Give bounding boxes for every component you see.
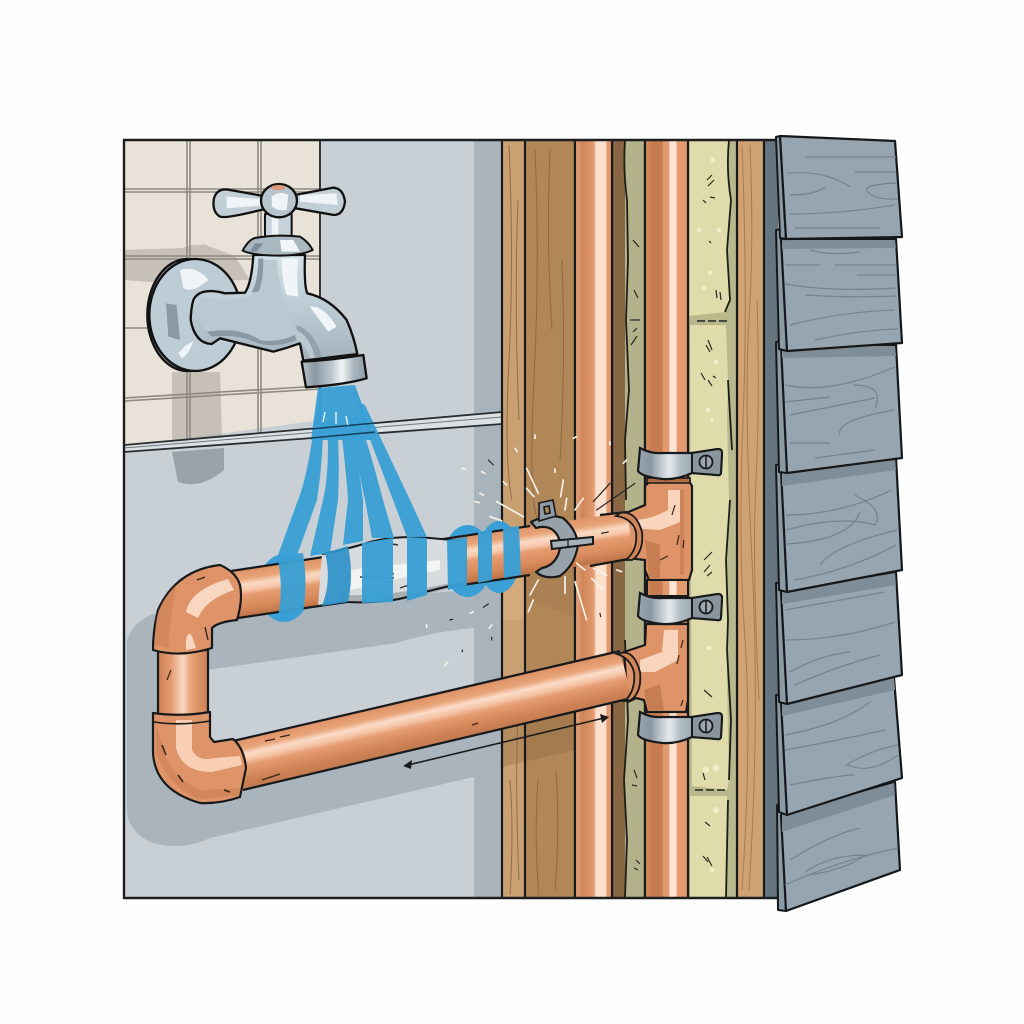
vertical pipe between elbows <box>158 650 208 720</box>
stud grain and shadows <box>502 145 575 895</box>
wood studs <box>502 140 525 898</box>
split clamp on pipe <box>531 500 593 577</box>
outer wood stud <box>737 140 764 898</box>
burst pipe bulge <box>318 537 463 606</box>
band C <box>362 538 393 603</box>
valve skirt <box>243 236 313 256</box>
upper horizontal pipe <box>231 512 642 618</box>
wall trim rail <box>124 412 502 452</box>
water spray sparks around leak <box>427 435 635 666</box>
clamp: bottom <box>638 712 722 743</box>
siding board 5 <box>776 573 902 704</box>
faucet body <box>191 255 357 361</box>
siding board 1 <box>776 136 902 239</box>
pipe shadow on wall <box>127 590 474 846</box>
siding board 2 <box>776 229 902 351</box>
water rings behind pipe <box>258 521 520 622</box>
white streaks in spray <box>323 412 348 426</box>
frame outline <box>124 140 778 898</box>
panel: tiled wall section <box>124 140 320 484</box>
upper elbow <box>153 565 241 654</box>
band E <box>447 537 467 590</box>
siding board 3 <box>776 341 902 473</box>
panel: siding boards <box>776 136 902 911</box>
lower elbow <box>153 712 246 803</box>
siding board 7 <box>777 782 900 911</box>
stem highlight <box>272 217 278 237</box>
band D <box>407 537 427 601</box>
aerator nozzle <box>302 355 367 387</box>
band A <box>277 553 306 617</box>
siding board 4 <box>776 458 902 592</box>
vertical copper pipes <box>575 140 688 898</box>
stream ribbon 2 <box>310 420 339 556</box>
rear of ring 2 <box>478 521 520 593</box>
spray fan top <box>311 385 372 440</box>
section lines <box>502 140 764 898</box>
T fitting: lower <box>624 624 688 712</box>
band B <box>322 546 351 606</box>
insulation <box>624 140 737 898</box>
stream ribbon 1 <box>278 405 323 558</box>
rear of ring 1 <box>443 525 492 597</box>
panel: interior wall <box>124 140 502 898</box>
siding board 6 <box>776 678 902 815</box>
T fitting: upper <box>626 478 692 596</box>
water wrapping around pipe <box>277 526 521 617</box>
cross handle <box>213 184 345 217</box>
tile grout <box>124 140 320 445</box>
wall plate <box>147 259 241 371</box>
trim lines across spray <box>311 423 375 438</box>
valve stem <box>265 214 292 238</box>
rear of band A <box>258 554 310 622</box>
panel: wall cross-section <box>502 140 778 898</box>
stream ribbon 5 <box>355 400 427 537</box>
stream ribbon 3 <box>340 420 363 545</box>
clamp: middle <box>638 593 722 624</box>
ring 2 front band <box>503 526 521 578</box>
direction arrow <box>403 714 609 769</box>
ring 1 front band <box>478 530 492 583</box>
sheathing strip <box>764 140 778 898</box>
clamp: top <box>638 448 722 479</box>
faucet shadow on tile <box>124 244 250 450</box>
water stream from faucet <box>278 385 427 558</box>
lower horizontal pipe <box>233 651 640 790</box>
stream ribbon 4 <box>350 415 394 538</box>
faucet <box>147 184 367 387</box>
